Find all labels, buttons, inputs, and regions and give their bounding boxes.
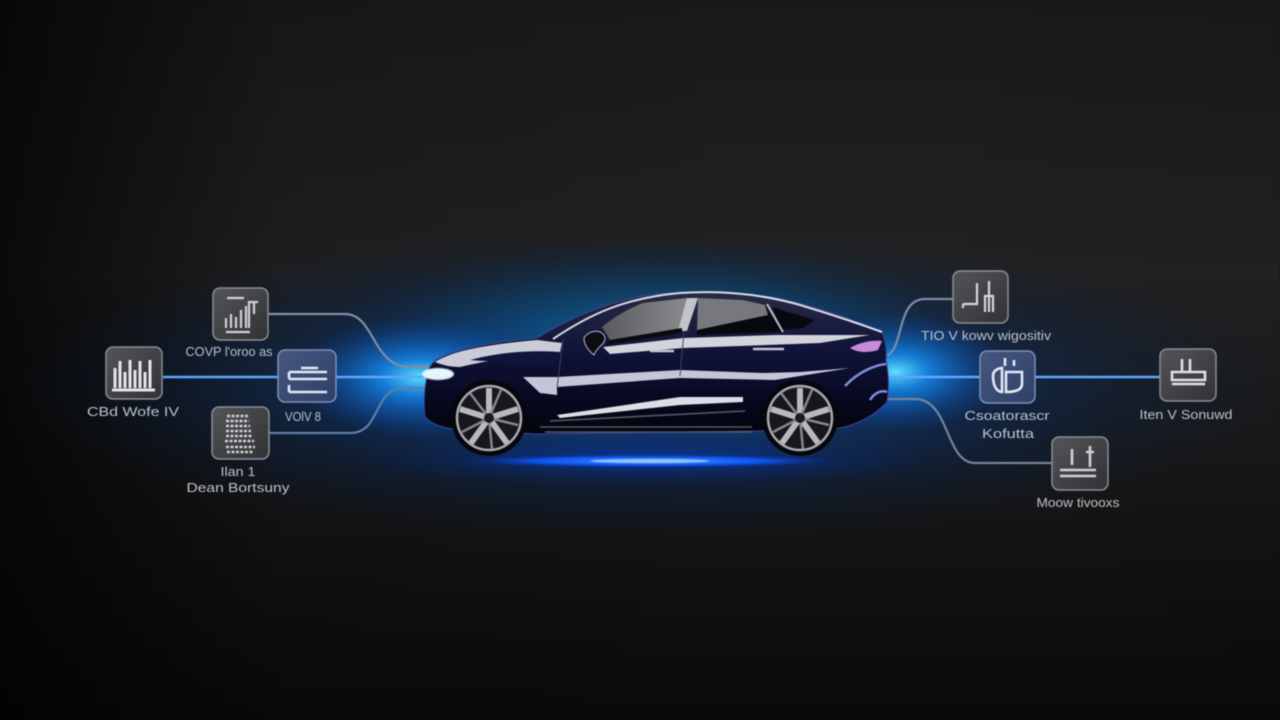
rear wheel xyxy=(762,380,838,456)
icon: tools xyxy=(963,281,993,312)
label xyxy=(186,465,290,495)
roof highlight xyxy=(553,292,882,339)
label: Csoatorascr xyxy=(964,409,1050,423)
icon: gauge tools xyxy=(1060,446,1096,476)
icon tile xyxy=(980,351,1035,403)
right node: upper xyxy=(921,271,1052,343)
label: VOlV 8 xyxy=(285,410,321,424)
door shut lines xyxy=(557,332,684,388)
sill shadow bands xyxy=(540,411,752,432)
label: Dean Bortsuny xyxy=(186,481,290,495)
label xyxy=(964,409,1050,441)
label: COVP l'oroo as xyxy=(186,345,272,359)
label: Ilan 1 xyxy=(220,465,256,479)
left node: lower xyxy=(186,407,290,495)
right node: lower xyxy=(1036,437,1120,510)
icon: cup xyxy=(993,358,1022,392)
label: TIO V kowv wigositiv xyxy=(921,329,1052,343)
icon tile xyxy=(212,407,269,459)
icon tile xyxy=(213,288,268,340)
floor light xyxy=(360,434,940,486)
mirror xyxy=(584,331,605,355)
icon: factory chart xyxy=(226,298,258,332)
left node: upper xyxy=(186,288,272,359)
car body xyxy=(424,292,888,434)
icon: layered panels xyxy=(289,368,327,392)
left node: centre xyxy=(278,350,336,424)
headlight xyxy=(422,368,454,380)
label: CBd Wofe IV xyxy=(87,405,180,419)
icon tile xyxy=(1052,437,1108,490)
fender dark band xyxy=(470,351,560,366)
lower right curve xyxy=(888,399,1052,463)
left horizontal beam xyxy=(163,374,430,380)
upper right curve xyxy=(885,299,953,356)
icon: bars xyxy=(112,360,155,390)
icon tile xyxy=(1160,349,1216,401)
icon tile xyxy=(106,347,162,399)
right node: centre xyxy=(964,351,1050,441)
door handles xyxy=(650,349,784,351)
hood reflection xyxy=(435,340,562,367)
icon: dense list xyxy=(225,416,255,452)
tail light xyxy=(850,341,882,352)
car xyxy=(422,292,888,456)
lower left curve xyxy=(268,388,430,433)
label: Kofutta xyxy=(982,427,1034,441)
connector lines xyxy=(163,299,1160,463)
label: Iten V Sonuwd xyxy=(1140,408,1233,422)
icon tile xyxy=(953,271,1008,323)
upper door reflection xyxy=(603,335,870,354)
body side reflection xyxy=(523,368,850,395)
side windows xyxy=(602,298,815,345)
front wheel xyxy=(451,380,527,456)
rear bumper detail xyxy=(845,364,887,400)
upper left curve xyxy=(268,314,432,367)
sill highlight xyxy=(557,397,743,418)
right node: far right xyxy=(1140,349,1233,422)
left node: far left xyxy=(87,347,180,419)
label: Moow tivooxs xyxy=(1036,496,1120,510)
right horizontal beam xyxy=(885,374,1160,380)
icon tile xyxy=(278,350,336,402)
icon: plant xyxy=(1172,359,1205,384)
blue glow behind car xyxy=(10,230,1280,540)
